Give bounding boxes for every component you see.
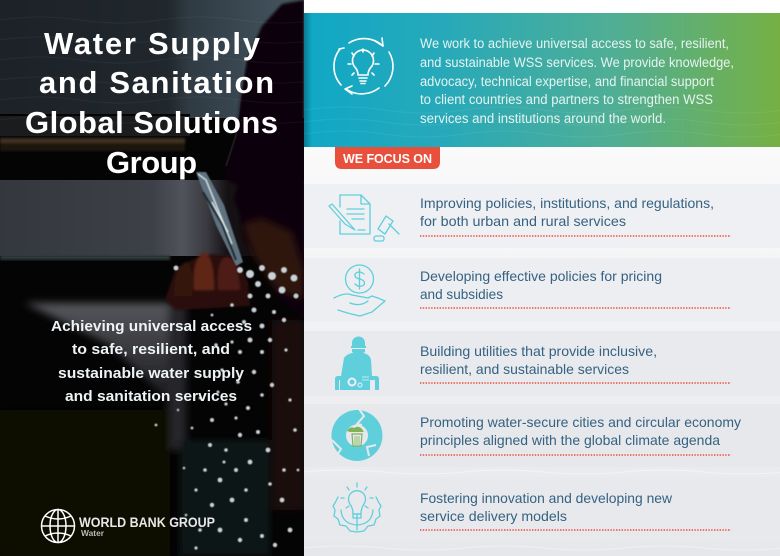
row 1: policies: Improving policies, institutions, and regulations,: [420, 195, 714, 211]
row 4: circular economy: principles aligned with the global climate agenda: [420, 432, 720, 448]
subtitle: [51, 318, 252, 405]
logo: World Bank Group Water: [42, 510, 215, 542]
row 4: circular economy: [304, 404, 780, 467]
row 4: circular economy: Promoting water-secure cities and circular economy: [420, 414, 741, 430]
row 1: policies: [304, 184, 780, 248]
subtitle: to safe, resilient, and: [72, 341, 230, 358]
icon: light bulb with circular arrows: [334, 38, 393, 94]
water splash droplets: [155, 265, 299, 550]
cupped hands: [165, 252, 250, 310]
title: Group: [106, 145, 197, 180]
right page background: [304, 0, 780, 556]
badge: we focus on: WE FOCUS ON: [343, 152, 432, 166]
logo: World Bank Group Water: Water: [81, 529, 104, 538]
icon: worker with gears: [335, 337, 379, 390]
icon: document and gavel: [329, 195, 399, 241]
icon: hand holding coin: [334, 265, 385, 316]
mission text: to client countries and partners to strengthen WSS: [420, 92, 713, 107]
row 2: pricing: Developing effective policies for pricing: [420, 268, 662, 284]
row 3: utilities: [304, 331, 780, 396]
mission text: advocacy, technical expertise, and financial support: [420, 74, 714, 89]
wave lines on photo: [0, 17, 320, 123]
subtitle: sustainable water supply: [58, 365, 245, 382]
row 5: innovation: [304, 470, 780, 550]
title: and Sanitation: [39, 65, 274, 100]
mission text: We work to achieve universal access to safe, resilient,: [420, 36, 729, 51]
logo: World Bank Group Water: WORLD BANK GROUP: [79, 515, 215, 530]
title: Global Solutions: [25, 105, 278, 140]
badge: we focus on: [335, 147, 440, 169]
panel: photo of person drinking water: [0, 0, 320, 556]
icon: bulb in gear: [333, 483, 381, 532]
row 5: innovation: service delivery models: [420, 508, 567, 524]
icon: recycling circle with bin: [332, 409, 382, 461]
panel: mission banner: [304, 13, 780, 147]
subtitle: Achieving universal access: [51, 318, 252, 335]
row 3: utilities: Building utilities that provide inclusive,: [420, 343, 657, 359]
row 1: policies: for both urban and rural services: [420, 213, 626, 229]
water stream: [196, 172, 243, 266]
row 2: pricing: [304, 258, 780, 322]
row 5: innovation: Fostering innovation and developing new: [420, 490, 673, 506]
row 3: utilities: resilient, and sustainable services: [420, 361, 629, 377]
row 2: pricing: and subsidies: [420, 286, 503, 302]
title: [25, 26, 278, 180]
mission text: and sustainable WSS services. We provide knowledge,: [420, 55, 734, 70]
icon: globe: [42, 510, 74, 542]
person silhouette: [224, 0, 304, 320]
subtitle: and sanitation services: [65, 388, 237, 405]
title: Water Supply: [44, 26, 261, 61]
mission text: services and institutions around the world.: [420, 111, 666, 126]
mission text: [420, 36, 734, 126]
